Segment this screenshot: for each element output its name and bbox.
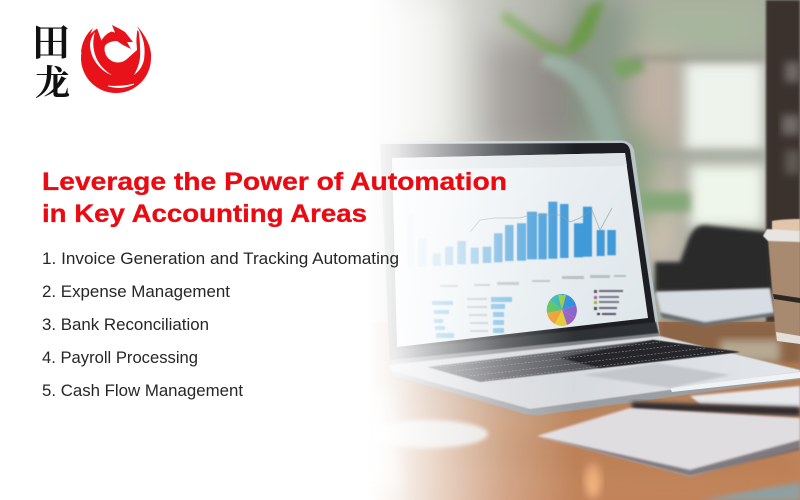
pie chart (547, 294, 577, 326)
list of automation areas (42, 250, 399, 400)
logo calligraphy characters: 田 (32, 12, 70, 67)
list of automation areas: 2. Expense Management (42, 283, 230, 301)
laptop screen (392, 153, 648, 347)
coffee cup (763, 219, 800, 344)
list of automation areas: 4. Payroll Processing (42, 349, 198, 367)
trackpad (583, 363, 730, 388)
blurred cup or disc on table (368, 420, 488, 448)
small table text smudges (440, 275, 626, 332)
chart trend line (470, 208, 612, 232)
pie legend (594, 290, 623, 315)
white left fade overlay (300, 0, 566, 500)
bar chart (407, 202, 616, 267)
laptop base (388, 336, 800, 414)
list of automation areas: 3. Bank Reconciliation (42, 316, 209, 334)
laptop lid (380, 141, 659, 366)
dark chair (655, 225, 772, 292)
notebook behind laptop (656, 288, 775, 326)
dark wall column (766, 0, 800, 340)
list of automation areas: 5. Cash Flow Management (42, 382, 243, 400)
lower table bars (432, 297, 512, 338)
logo calligraphy characters: 龙 (35, 56, 70, 106)
logo calligraphy characters (32, 12, 70, 106)
notebook and pen in foreground (537, 386, 800, 476)
title (42, 168, 507, 228)
table surface (381, 320, 800, 500)
laptop (375, 140, 800, 415)
keyboard (427, 340, 740, 382)
laptop hinge strip (449, 321, 660, 353)
title: in Key Accounting Areas (42, 200, 367, 228)
photo scene and fade (380, 0, 800, 500)
title: Leverage the Power of Automation (42, 168, 507, 196)
list of automation areas: 1. Invoice Generation and Tracking Automating (42, 250, 399, 268)
background: blurred window and plants (399, 0, 800, 322)
logo (32, 12, 151, 106)
logo dragon emblem (81, 20, 151, 93)
